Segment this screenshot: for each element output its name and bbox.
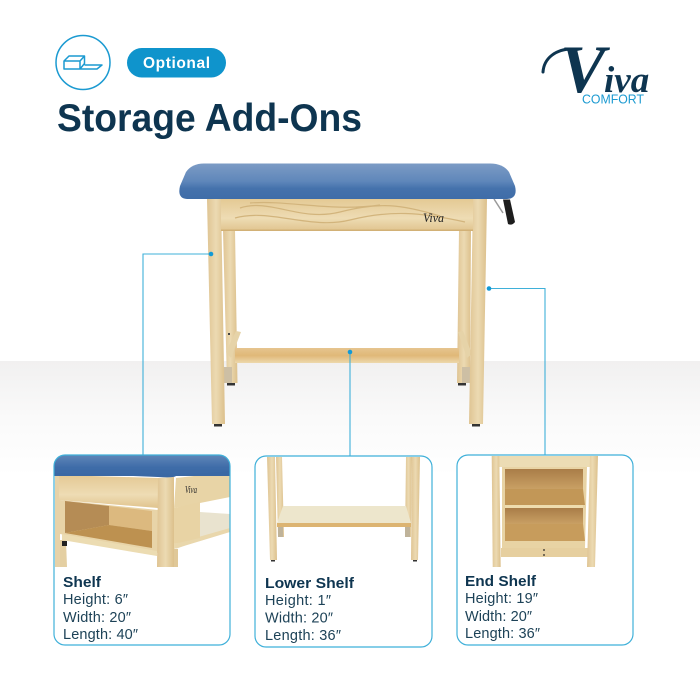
leg feet [214,424,480,426]
floor background [0,361,700,476]
lower shelf photo [267,457,420,562]
panel: end shelf [457,455,633,645]
badge: Optional [127,48,226,78]
apron with wood grain [221,199,473,231]
back right leg [457,230,471,383]
brand logo: COMFORT [582,92,644,106]
shelf width: Width: 20″ [63,610,131,626]
brand logo: iva [604,60,649,101]
back left leg [223,230,238,383]
main product photo: treatment table [179,164,516,426]
right bracket [458,331,472,386]
connector: lower shelf [348,350,352,456]
title: Storage Add-Ons [57,97,362,140]
lower shelf width: Width: 20″ [265,610,333,626]
end shelf height: Height: 19″ [465,591,538,607]
header icon: shelf in circle [56,36,110,90]
front right leg [469,199,487,424]
end shelf heading: End Shelf [465,573,537,590]
lower cross rail [235,348,459,363]
bracket and handle [494,199,515,225]
end shelf length: Length: 36″ [465,626,540,642]
lower shelf heading: Lower Shelf [265,575,355,592]
shelf length: Length: 40″ [63,627,138,643]
apron logo: Viva [423,210,444,225]
lower shelf length: Length: 36″ [265,628,341,644]
shelf logo: Viva [185,484,197,496]
shelf photo [54,455,230,567]
upholstered pad [179,164,516,199]
brand logo [543,31,649,107]
panel: shelf [54,455,230,645]
panel: lower shelf [255,456,432,647]
end shelf width: Width: 20″ [465,609,532,625]
shelf height: Height: 6″ [63,592,128,608]
brand logo: V [560,31,610,107]
connector: shelf [143,252,213,456]
badge: Optional: Optional [143,55,210,72]
connector: end shelf [487,286,545,455]
lower shelf height: Height: 1″ [265,593,331,609]
left bracket [224,331,241,386]
front left leg [207,199,225,424]
shelf heading: Shelf [63,574,102,591]
end shelf photo [492,456,598,567]
